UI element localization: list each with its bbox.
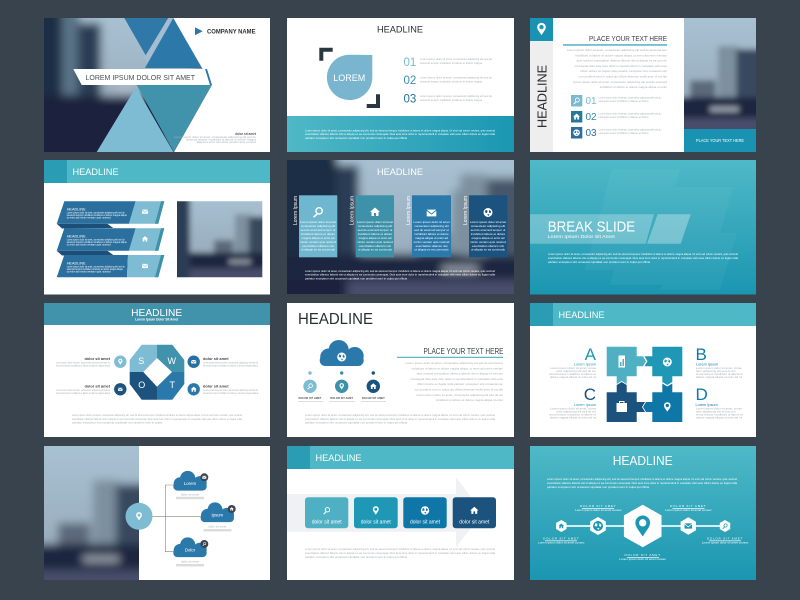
body paragraph: incididunt ut labore et dolore magna aliqua, ut enim ad minim veniam [575,53,667,57]
SWOT octagon: S [138,356,144,366]
timeline labels [538,504,749,561]
slide 8: cloud diagram [287,303,514,437]
body paragraph: non proident sunt in culpa qui officia deserunt mollit anim id est lab [415,388,503,392]
timeline labels: DOLOR SIT AMET [543,536,579,540]
icon circles [114,356,200,395]
body text: Lorem ipsum dolor sit amet, consectetur adipiscing elit, sed do eiusmod tempor incididunt ut labore et dolore magna aliqua. Ut enim ad minim veniam, quis nostrud [547,477,737,481]
left labels: dolor sit amet [84,356,111,361]
icon list: eiusmod tempor incididunt ut labore et dolore [598,131,649,135]
card 3 [406,195,451,257]
card 4: Lorem Ipsum [463,196,469,225]
icon list: Lorem ipsum dolor sit amet, consectetur adipiscing elit sed do [598,128,662,132]
card 1: dolor sit amet [312,520,342,526]
footer text: exercitation ullamco laboris nisi ut aliquip ex ea commodo consequat. Duis aute irure dolor in reprehenderit in voluptate velit esse cillum dolore eu fugiat nulla [305,272,495,276]
top triangle [124,18,168,56]
corner brackets [321,50,378,106]
label B: Lorem Ipsum [696,362,718,366]
company name: COMPANY NAME [207,30,256,36]
numbered list: 01 [404,57,416,69]
body paragraph: incididunt ut labore et dolore magna aliqua, ut enim ad minim veniam [411,366,503,370]
body text: Lorem ipsum dolor sit amet, consectetur adipiscing elit, sed do eiusmod tempor incididunt ut labore et dolore magna aliqua. Ut enim ad minim veniam, quis nostrud [72,413,242,417]
footer text [305,269,495,280]
body text: exercitation ullamco laboris nisi ut aliquip ex ea commodo consequat. Duis aute irure dolor in reprehenderit in voluptate velit esse cillum dolore eu fugiat nulla [547,481,737,485]
cloud 3: dolor sit amet [181,560,199,564]
icon column 1 [298,380,323,402]
header bar: Lorem Ipsum Dolor Sit Amet [135,318,179,322]
card 1: consectetur adipiscing elit [301,224,335,228]
numbered list: Lorem ipsum dolor sit amet, consectetur adipiscing elit sed do [420,57,492,61]
light blue triangle [97,87,173,152]
slide 4: ribbons and photo [44,160,270,294]
card 1: exercitation ullamco nisi [302,244,334,248]
card 2: dolor sit amet [361,520,391,526]
timeline labels: Lorem ipsum dolor sit amet consec [619,557,666,561]
cloud 2: Ipsum [211,513,224,518]
card 3: magna aliqua ut enim ad [415,236,448,240]
cloud 2: dolor sit amet [208,524,226,528]
ribbon title [73,69,212,85]
header bar: HEADLINE [558,310,604,321]
card 2: Lorem Ipsum [350,196,356,225]
puzzle piece C [607,382,645,422]
card 4: minim veniam quis nostrud [470,240,506,244]
ribbon 3 [57,255,164,277]
timeline labels: DOLOR SIT AMET [625,553,661,557]
footer text: Lorem ipsum dolor sit amet, consectetur adipiscing elit, sed do eiusmod tempor incididunt ut labore et dolore magna aliqua. Ut enim ad minim veniam, quis nostrud [305,413,495,417]
ribbon 1: ut enim ad minim veniam quis nostrud [67,216,111,220]
body text: pariatur excepteur sint occaecat cupidatat non proident sunt in culpa qui officia [548,260,650,264]
ribbon 1: HEADLINE [67,208,86,212]
cover caption: Lorem ipsum dolor sit amet, consectetur adipiscing elit sed do [174,135,256,139]
label C [549,385,596,420]
cover caption: dolor sit amet [235,132,257,136]
ribbon title: LOREM IPSUM DOLOR SIT AMET [86,73,195,82]
right labels: dolor sit amet [203,384,229,388]
card 3 [403,497,447,528]
teal triangle [137,85,212,152]
label A: Lorem Ipsum [574,362,596,366]
card 2: Lorem ipsum dolor sit amet [357,220,393,224]
label B: tetur adipiscing elit sed do eiu [696,369,736,373]
card 2: minim veniam quis nostrud [357,240,393,244]
card 3: dolor sit amet [410,520,441,526]
ribbon 2: eiusmod tempor incididunt ut labore et dolore magna aliqua [67,240,127,244]
header bar [44,303,270,325]
body paragraph: cillum dolore eu fugiat nulla pariatur, excepteur sint occaecat cup [417,382,503,386]
footer text: Lorem ipsum dolor sit amet, consectetur adipiscing elit, sed do eiusmod tempor incididunt ut labore et dolore magna aliqua. Ut enim ad minim veniam, quis nostrud [305,269,495,273]
photo caption box [684,129,756,152]
slide 2: drop and numbered list [287,18,514,152]
card 2: magna aliqua ut enim ad [359,236,392,240]
right labels: Lorem ipsum dolor sit amet, consectetur adipiscing elit sed do [203,388,258,392]
numbered list [404,57,492,106]
cover caption: aliqua ut enim ad minim veniam quis nostrud [197,140,256,144]
city photo [44,446,139,580]
body paragraph: Lorem ipsum dolor sit amet, consectetur adipiscing elit sed do eiusmod te [405,361,503,365]
cloud 1: dolor sit amet [181,492,199,496]
cloud 1 [173,471,208,499]
label C: smod tempor incididunt ut labore et [549,412,596,416]
label A: dolore magna aliqua ut enim ad mi [550,375,596,379]
body paragraph: incididunt ut labore et dolore magna aliqua ut enim [436,398,503,402]
background photo [287,160,514,294]
ribbon 3: ut enim ad minim veniam quis nostrud [67,270,111,274]
card 1 [293,195,337,257]
numbered list: 02 [404,75,416,87]
ribbon 1: eiusmod tempor incididunt ut labore et dolore magna aliqua [67,213,127,217]
body paragraph: cillum dolore eu fugiat nulla pariatur, excepteur sint occaecat cupi [580,69,667,73]
footer text: exercitation ullamco laboris nisi ut aliquip ex ea commodo consequat. Duis aute irure dolor in reprehenderit in voluptate velit esse cillum dolore eu fugiat nulla [305,417,495,421]
card 3: ut aliquip ex ea commodo [414,248,449,252]
icon list: eiusmod tempor incididunt ut labore et dolore [598,115,649,119]
card 2: exercitation ullamco nisi [359,244,391,248]
white right area [173,18,270,152]
slide 12: hexagon timeline [530,446,756,580]
hexagon 1 [556,520,566,532]
left labels: Lorem ipsum dolor sit amet, consectetur adipiscing elit sed do [56,388,110,392]
card 2: ut aliquip ex ea commodo [358,248,392,252]
card 1: ut aliquip ex ea commodo [301,248,335,252]
label C: C [584,385,596,404]
body paragraph: quis nostrud exercitation ullamco laboris nisi ut aliquip ex ea com [417,372,503,376]
ribbon 2: HEADLINE [67,234,86,238]
label B: dolore magna aliqua ut enim ad mi [696,375,742,379]
label A: smod tempor incididunt ut labore et [549,372,596,376]
blurred city photo [44,18,212,152]
header bar [530,303,756,326]
card 4 [463,195,507,257]
numbered list: Lorem ipsum dolor sit amet, consectetur adipiscing elit sed do [420,76,492,80]
card 4: incididunt labore et dolore [471,232,506,236]
left labels [56,356,111,395]
card 1: magna aliqua ut enim ad [302,236,335,240]
icon list [571,95,662,139]
card 4 [453,497,496,528]
headline: HEADLINE [377,167,423,178]
icon column 1: DOLOR SIT AMET [299,396,322,400]
slide 6: break slide [530,160,756,294]
icon list: 03 [586,128,597,139]
card 3: minim veniam quis nostrud [414,240,450,244]
body text: exercitation ullamco laboris nisi ut aliquip ex ea commodo consequat. Duis aute irure dolor in reprehenderit in voluptate velit esse cillum dolore eu fugiat nulla [305,551,495,555]
card 3: incididunt labore et dolore [414,232,449,236]
card 3: sed do eiusmod tempor ut [414,228,449,232]
connector dots [308,371,375,375]
hexagon 2 [590,517,606,535]
card 4: Lorem ipsum dolor sit amet [470,220,506,224]
grey side column [530,41,553,152]
body text: exercitation ullamco laboris nisi ut aliquip ex ea commodo consequat. Duis aute irure dolor in reprehenderit in voluptate velit esse cillum dolore eu fugiat nulla [72,417,242,421]
slide 11: arrow with four cards [287,446,514,580]
city photo [684,18,756,129]
ribbon 2: ut enim ad minim veniam quis nostrud [67,242,111,246]
ribbon 2 [57,228,164,256]
label B: smod tempor incididunt ut labore et [696,372,743,376]
label B [696,345,743,379]
label A [549,345,597,379]
label D: dolore magna aliqua ut enim ad mi [696,416,742,420]
SWOT octagon: T [170,380,176,390]
label A: tetur adipiscing elit sed do eiu [556,369,596,373]
teal footer band: Lorem ipsum dolor sit amet, consectetur adipiscing elit, sed do eiusmod tempor incididunt ut labore et dolore magna aliqua. Ut enim ad minim veniam, quis nostrud [305,128,495,132]
hexagon 4 [681,517,696,535]
teal footer band: pariatur excepteur sint occaecat cupidatat non proident sunt in culpa qui officia [305,136,407,140]
card 2: consectetur adipiscing elit [358,224,392,228]
body paragraph [405,361,503,402]
body text: pariatur excepteur sint occaecat cupidatat non proident sunt in culpa qui officia [305,555,407,559]
center pin circle [126,503,152,530]
body paragraph: non proident sunt in culpa qui officia deserunt mollit anim id est lab [579,74,667,78]
pale diagonal strip [144,18,173,62]
icon: play arrow [195,27,203,35]
timeline labels: DOLOR SIT AMET [707,536,743,540]
label C: tetur adipiscing elit sed do eiu [556,410,596,414]
timeline labels: DOLOR SIT AMET [580,504,616,508]
ribbon 3: HEADLINE [67,262,86,266]
label B: Lorem ipsum dolor sit amet, conse [696,366,742,370]
center hexagon with pin [624,505,662,547]
puzzle piece D [643,384,682,422]
right labels: eiusmod tempor incididunt ut labore et dolore magna aliqua [203,364,258,368]
cloud 3 [173,537,208,566]
big background arrow [287,477,483,547]
faint parallelograms [585,169,737,290]
cover caption [174,132,257,144]
icon: cloud [320,340,364,366]
footer text [305,413,495,424]
label D: Lorem ipsum dolor sit amet, conse [696,406,742,410]
slide 9: puzzle [530,303,756,437]
left labels: dolor sit amet [84,384,111,388]
body paragraph: Lorem ipsum dolor sit amet, consectetur adipiscing elit sed do eiusmod [573,80,667,84]
body paragraph: quis nostrud exercitation ullamco laboris nisi ut aliquip ex ea commo [577,59,667,63]
tree connector [152,485,202,552]
icon list: Lorem ipsum dolor sit amet, consectetur adipiscing elit sed do [598,96,662,100]
SWOT octagon: O [138,380,145,390]
body text: Lorem ipsum dolor sit amet, consectetur adipiscing elit, sed do eiusmod tempor incididunt ut labore et dolore magna aliqua. Ut enim ad minim veniam, quis nostrud [305,547,495,551]
body paragraph [567,48,667,89]
body paragraph: consequat duis aute irure dolor in reprehenderit in voluptate velit esse [574,64,667,68]
timeline line [562,525,725,527]
slide 7: SWOT [44,303,270,437]
teal footer band: exercitation ullamco laboris nisi ut aliquip ex ea commodo consequat. Duis aute irure dolor in reprehenderit in voluptate velit esse cillum dolore eu fugiat nulla [305,132,495,136]
ribbon 2: Lorem ipsum dolor sit amet, consectetur adipiscing elit sed do [67,238,125,242]
card 2: sed do eiusmod tempor ut [358,228,393,232]
ribbon 3: eiusmod tempor incididunt ut labore et dolore magna aliqua [67,267,123,271]
subheading [563,34,667,46]
body text [72,413,242,424]
rotated headline: HEADLINE [536,65,550,128]
card 1: incididunt labore et dolore [301,232,336,236]
blue triangle [145,18,202,68]
card 4: dolor sit amet [459,520,490,526]
body paragraph: incididunt ut labore et dolore magna aliqua ut enim [600,85,667,89]
card 4: consectetur adipiscing elit [471,224,505,228]
label C: dolore magna aliqua ut enim ad mi [550,416,596,420]
break slide title: BREAK SLIDE [548,218,635,236]
header bar [287,446,514,469]
icon list: eiusmod tempor incididunt ut labore et dolore [598,99,649,103]
cloud 3: Dolor [185,548,196,552]
card 3: consectetur adipiscing elit [414,224,449,228]
label D: smod tempor incididunt ut labore et [696,412,743,416]
photo caption box: PLACE YOUR TEXT HERE [696,138,744,144]
timeline labels: Lorem ipsum dolor sit amet consec [575,508,622,512]
card 3: Lorem Ipsum [406,196,412,225]
timeline labels: DOLOR SIT AMET [670,504,706,508]
cloud 1: Lorem [184,481,197,486]
card 4: sed do eiusmod tempor ut [471,228,506,232]
cloud 2 [201,502,236,531]
card 4: magna aliqua ut enim ad [472,236,505,240]
body text [547,477,737,489]
subheading [397,347,504,358]
right labels: eiusmod tempor incididunt ut labore et dolore magna aliqua [203,391,258,395]
slide 1: cover [44,18,270,152]
footer text: pariatur excepteur sint occaecat cupidatat non proident sunt in culpa qui officia [305,420,407,424]
card 2: incididunt labore et dolore [358,232,393,236]
numbered list: eiusmod tempor incididunt ut labore et dolore magna [420,98,482,102]
numbered list: eiusmod tempor incididunt ut labore et dolore magna [420,61,482,65]
card 2 [354,497,398,528]
ribbon 3: Lorem ipsum dolor sit amet, consectetur adipiscing elit sed do [67,264,125,268]
SWOT octagon [130,345,184,400]
icon list: Lorem ipsum dolor sit amet, consectetur adipiscing elit sed do [598,112,662,116]
label A: A [585,345,597,364]
icon list: 02 [586,112,597,123]
right labels: Lorem ipsum dolor sit amet, consectetur adipiscing elit sed do [203,360,258,364]
body text [548,252,738,264]
cover caption: eiusmod tempor incididunt ut labore et dolore magna [186,138,256,142]
numbered list: Lorem ipsum dolor sit amet, consectetur adipiscing elit sed do [420,94,492,98]
label B: B [696,345,707,364]
card 4: exercitation ullamco nisi [472,244,504,248]
subtitle: Lorem Ipsum Dolor Sit Amet [548,234,615,240]
pin tab [530,18,553,41]
large headline: HEADLINE [298,311,373,328]
subheading: PLACE YOUR TEXT HERE [424,347,504,356]
puzzle piece B [644,347,682,385]
icon column 3: DOLOR SIT AMET [362,396,385,400]
ribbon 1: Lorem ipsum dolor sit amet, consectetur adipiscing elit sed do [67,210,125,214]
footer text: pariatur excepteur sint occaecat cupidatat non proident sunt in culpa qui officia [305,276,407,280]
label C: Lorem ipsum dolor sit amet, conse [550,406,596,410]
card 4: ut aliquip ex ea commodo [471,248,505,252]
numbered list: 03 [404,94,416,106]
label D: Lorem Ipsum [696,403,718,407]
body text: Lorem ipsum dolor sit amet, consectetur adipiscing elit, sed do eiusmod tempor incididunt ut labore et dolore magna aliqua. Ut enim ad minim veniam, quis nostrud [548,252,738,256]
icon list: 01 [586,96,597,107]
card 3: Lorem ipsum dolor sit amet [413,220,450,224]
slide 3: side headline with photo [530,18,756,152]
body paragraph: consequat duis aute irure dolor in reprehenderit in voluptate velit esse [410,377,503,381]
card 1 [305,497,348,528]
timeline labels: Lorem ipsum dolor sit amet consec [538,540,585,544]
puzzle piece A [607,347,646,384]
body text [305,547,495,559]
card 1: Lorem ipsum dolor sit amet [300,220,336,224]
label D: tetur adipiscing elit sed do eiu [696,410,736,414]
header bar: HEADLINE [131,308,182,319]
icon column 2 [330,380,354,402]
left labels: eiusmod tempor incididunt ut labore et dolore magna aliqua [56,391,110,395]
drop shape with label: LOREM [333,73,365,83]
subheading: PLACE YOUR TEXT HERE [589,34,667,43]
header bar: HEADLINE [316,453,362,464]
SWOT octagon: W [167,356,176,366]
card 1: minim veniam quis nostrud [300,240,336,244]
right labels [203,356,258,395]
numbered list: eiusmod tempor incididunt ut labore et dolore magna [420,80,482,84]
card 1: Lorem Ipsum [293,196,299,225]
left labels: Lorem ipsum dolor sit amet, consectetur adipiscing elit sed do [56,360,110,364]
slide 5: four cards over photo [287,160,514,294]
card 3: exercitation ullamco nisi [416,244,448,248]
headline: HEADLINE [613,453,673,468]
header bar [44,160,270,183]
left labels: eiusmod tempor incididunt ut labore et dolore magna aliqua [56,364,110,368]
hexagon 5 [720,520,730,532]
body paragraph: Lorem ipsum dolor sit amet, consectetur adipiscing elit sed do eiusmod tem [567,48,667,52]
right labels: dolor sit amet [203,356,229,361]
body text: pariatur excepteur sint occaecat cupidatat non proident sunt in culpa qui officia [547,485,649,489]
city photo [177,201,262,278]
timeline labels: Lorem ipsum dolor sit amet consec [702,540,749,544]
label C: Lorem Ipsum [574,403,596,407]
icon column 3 [361,380,386,402]
body text: pariatur excepteur sint occaecat cupidatat non proident sunt in culpa [72,420,162,424]
headline: HEADLINE [377,24,423,36]
break band accent [647,214,691,244]
slide 10: photo and cloud tree [44,446,270,580]
body paragraph: Lorem ipsum dolor sit amet, consectetur adipiscing elit sed do eiu [416,393,503,397]
card 1: sed do eiusmod tempor ut [301,228,336,232]
label A: Lorem ipsum dolor sit amet, conse [550,366,596,370]
header bar: HEADLINE [72,167,118,178]
drop shape with label [327,55,372,100]
label D [696,385,743,420]
card 2 [350,195,394,257]
icon column 2: DOLOR SIT AMET [330,396,353,400]
label D: D [696,385,708,404]
ribbon 1 [57,201,164,228]
timeline labels: Lorem ipsum dolor sit amet consec [665,508,712,512]
body text: exercitation ullamco laboris nisi ut aliquip ex ea commodo consequat. Duis aute irure dolor in reprehenderit in voluptate velit esse cillum dolore eu fugiat nulla [548,256,738,260]
teal footer band [287,116,514,152]
break band [530,214,654,244]
